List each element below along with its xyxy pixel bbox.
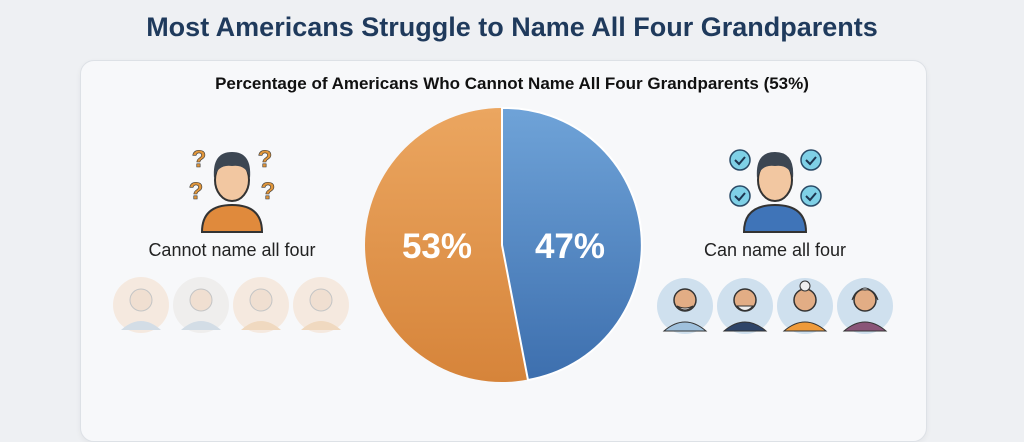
icon: confused person: [189, 146, 275, 232]
icon: confident person: [730, 150, 821, 232]
label: can: Can name all four: [704, 240, 846, 260]
pie chart: 47%: [535, 227, 605, 266]
grandparents: [657, 278, 893, 334]
label: cannot: Cannot name all four: [148, 240, 316, 260]
icon: confused person: ?: [261, 178, 275, 205]
icon: confused person: ?: [189, 178, 203, 205]
faded grandparents: [113, 277, 349, 333]
panel: [80, 60, 927, 442]
icon: confused person: ?: [192, 146, 206, 173]
pie chart: 53%: [402, 227, 472, 266]
title: Most Americans Struggle to Name All Four Grandparents: [146, 12, 878, 42]
subtitle: Percentage of Americans Who Cannot Name All Four Grandparents (53%): [215, 74, 809, 93]
icon: confused person: ?: [258, 146, 272, 173]
